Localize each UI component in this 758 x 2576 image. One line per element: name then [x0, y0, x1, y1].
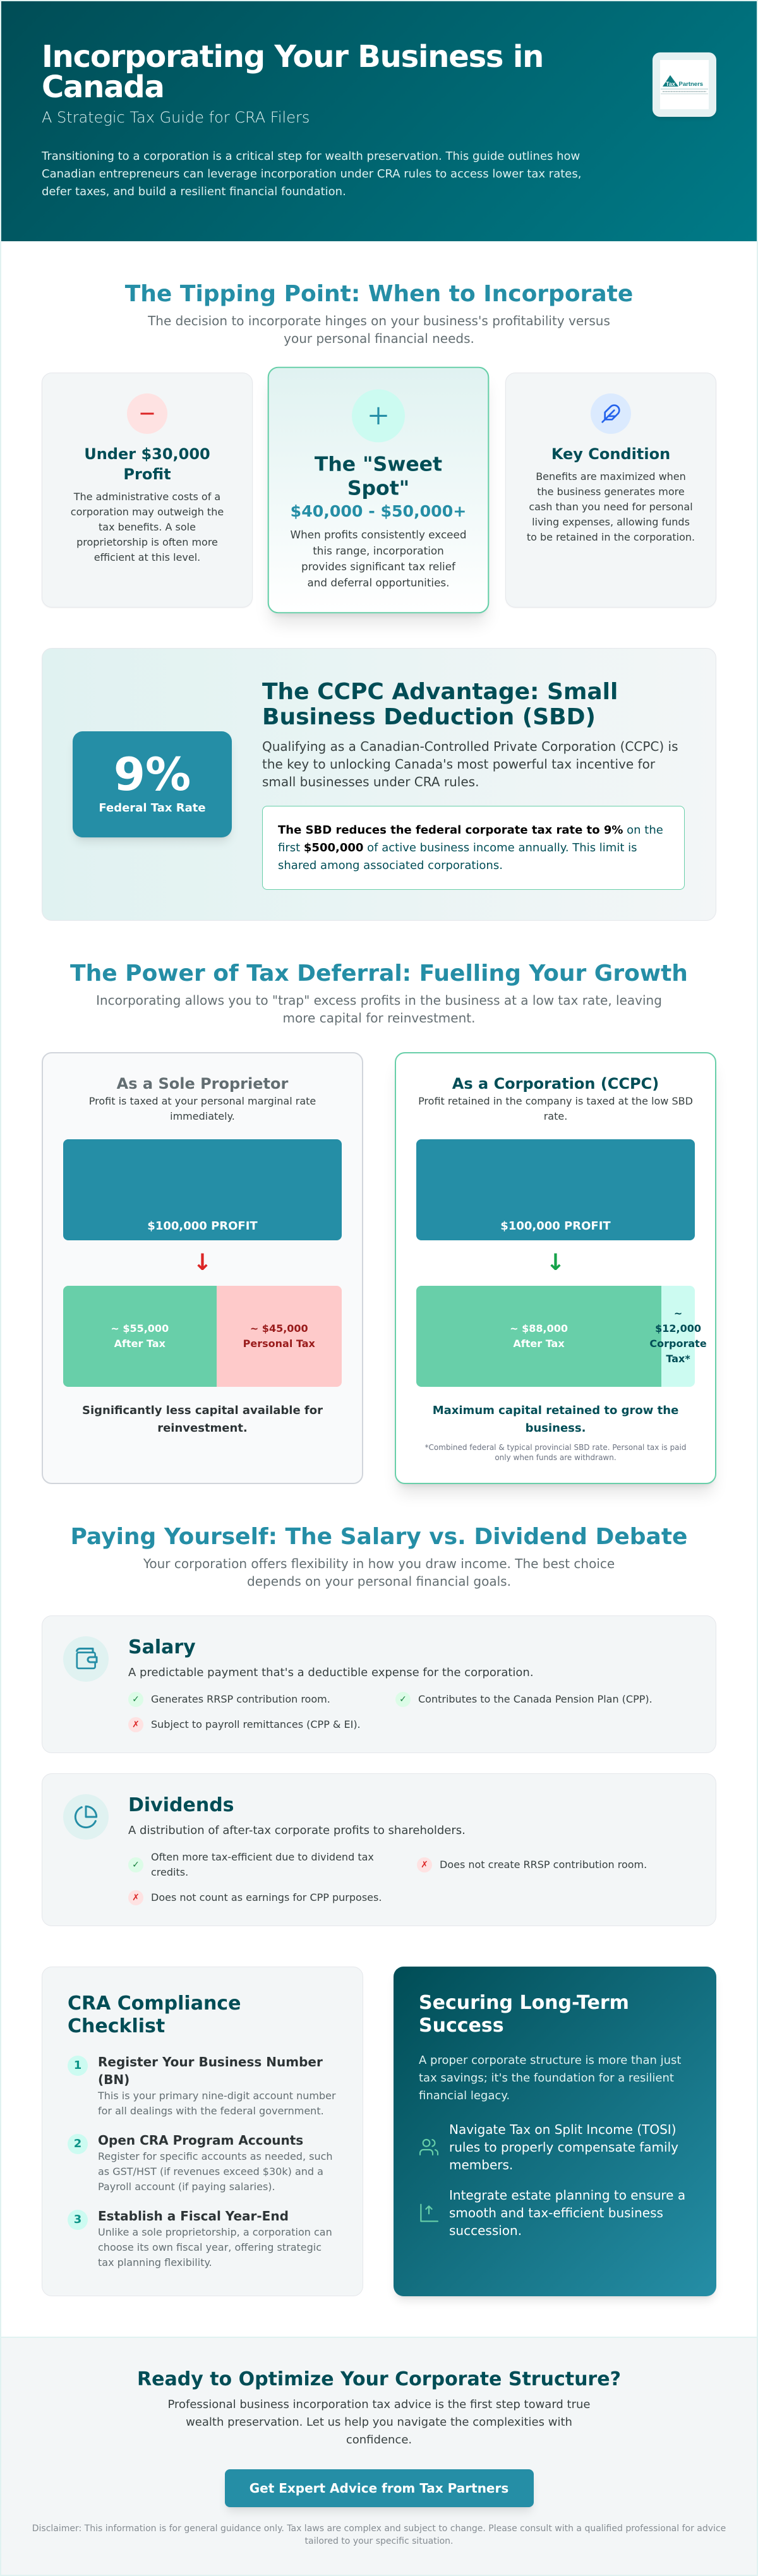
- point: estate planning: Integrate estate planning to ensure a: [449, 2188, 685, 2203]
- section intro: [96, 993, 662, 1026]
- footnote: [424, 1443, 686, 1462]
- pro: CPP: Contributes to the Canada Pension Plan (CPP).: [418, 1693, 653, 1705]
- icon: feather: [591, 393, 631, 434]
- pro: tax efficient: credits.: [151, 1866, 188, 1878]
- CTA button: [225, 2469, 533, 2507]
- card text: efficient at this level.: [94, 551, 200, 563]
- step 1: for all dealings with the federal government.: [98, 2105, 324, 2117]
- card: sweet spot: [268, 367, 489, 613]
- heading: The CCPC Advantage: Small: [262, 678, 618, 705]
- panel title: As a Sole Proprietor: [117, 1075, 288, 1093]
- panel text: Profit retained in the company is taxed at the low SBD: [418, 1095, 693, 1107]
- pro: tax efficient: [128, 1851, 374, 1878]
- con: no RRSP room: ✗: [421, 1860, 428, 1870]
- icon: minus: [127, 393, 167, 434]
- card title: Key Condition: [551, 445, 670, 463]
- panel: salary: [42, 1615, 716, 1753]
- text: the key to unlocking Canada's most powerful tax incentive for: [262, 757, 655, 772]
- heading: The Power of Tax Deferral: Fuelling Your Growth: [70, 961, 688, 986]
- after tax segment: After Tax: [114, 1338, 165, 1350]
- after tax segment: [416, 1286, 661, 1387]
- intro paragraph: defer taxes, and build a resilient financial foundation.: [42, 185, 346, 198]
- step 3: Unlike a sole proprietorship, a corporation can: [98, 2226, 332, 2238]
- SBD explanation: [262, 678, 685, 890]
- step 1: [68, 2054, 336, 2117]
- intro paragraph: Transitioning to a corporation is a critical step for wealth preservation. This guide outlines how: [42, 150, 580, 163]
- panel text: rate.: [544, 1110, 567, 1122]
- panel: long-term success: [394, 1967, 716, 2296]
- section intro: your personal financial needs.: [284, 331, 474, 346]
- card text: and deferral opportunities.: [307, 576, 450, 589]
- pro: RRSP room: ✓: [132, 1694, 140, 1704]
- card text: When profits consistently exceed: [290, 529, 467, 541]
- card text: Benefits are maximized when: [536, 470, 686, 482]
- icon: users: [419, 2138, 438, 2155]
- con: payroll: ✗: [132, 1720, 140, 1730]
- CTA heading: Ready to Optimize Your Corporate Structure?: [137, 2368, 621, 2390]
- section intro: [143, 1556, 615, 1589]
- panel text: immediately.: [170, 1110, 235, 1122]
- pro: CPP: ✓: [399, 1694, 407, 1704]
- corporate tax segment: Corporate: [649, 1338, 707, 1350]
- summary: Significantly less capital available for: [82, 1404, 323, 1417]
- title: Incorporating Your Business in: [42, 39, 543, 75]
- heading: Success: [419, 2015, 504, 2037]
- card text: this range, incorporation: [313, 544, 444, 557]
- intro paragraph: [42, 150, 581, 198]
- arrow: down red: ↓: [193, 1250, 212, 1276]
- profit bar: $100,000 PROFIT: [500, 1219, 611, 1233]
- point: estate planning: [420, 2188, 685, 2238]
- header banner: [1, 1, 757, 241]
- step 2: [68, 2133, 333, 2193]
- after tax segment: ~ $55,000: [111, 1322, 169, 1334]
- card text: The administrative costs of a: [74, 491, 220, 503]
- pro: tax efficient: ✓: [132, 1860, 140, 1870]
- summary: [433, 1404, 678, 1435]
- disclaimer: Disclaimer: This information is for general guidance only. Tax laws are complex and subject to change. Please consult with a qualified professional for advice: [32, 2524, 726, 2534]
- panel title: As a Corporation (CCPC): [452, 1075, 659, 1093]
- panel: CRA compliance checklist: [42, 1967, 363, 2296]
- CTA button: Get Expert Advice from Tax Partners: [250, 2481, 508, 2496]
- corporate tax segment: [661, 1286, 695, 1387]
- card text: to be retained in the corporation.: [527, 531, 695, 543]
- step 2: as GST/HST (if revenues exceed $30k) and a: [98, 2166, 323, 2178]
- text: A proper corporate structure is more than just: [419, 2054, 681, 2067]
- corporate tax segment: ~: [674, 1307, 682, 1319]
- disclaimer: tailored to your specific situation.: [304, 2536, 454, 2546]
- summary: reinvestment.: [157, 1422, 248, 1435]
- heading: Paying Yourself: The Salary vs. Dividend Debate: [71, 1524, 687, 1550]
- card text: tax benefits. A sole: [99, 521, 196, 533]
- logo: Tax Partners: [653, 52, 716, 117]
- section: paying yourself heading: [71, 1524, 687, 1589]
- panel text: [418, 1095, 693, 1122]
- step 1: 1: [74, 2059, 81, 2072]
- CTA text: [1, 2396, 757, 2449]
- personal tax segment: Personal Tax: [243, 1338, 315, 1350]
- card: key condition: [505, 373, 716, 608]
- step 1: Register Your Business Number: [98, 2054, 323, 2070]
- callout: first $500,000 of active business income annually. This limit is: [278, 841, 637, 854]
- heading: [68, 1992, 241, 2037]
- callout: shared among associated corporations.: [278, 859, 503, 872]
- con: no RRSP room: Does not create RRSP contribution room.: [440, 1859, 647, 1871]
- heading: [419, 1992, 629, 2037]
- card title: The "Sweet: [315, 453, 442, 476]
- heading: [262, 678, 618, 730]
- card text: corporation may outweigh the: [71, 506, 224, 518]
- panel: sole proprietor: [42, 1052, 363, 1484]
- heading: Securing Long-Term: [419, 1992, 629, 2014]
- section: tax deferral: [42, 961, 718, 1497]
- profit bar: [416, 1139, 695, 1240]
- stat: 9% federal tax rate: [73, 731, 232, 837]
- section intro: Your corporation offers flexibility in how you draw income. The best choice: [143, 1556, 615, 1571]
- con: no CPP: ✗: [132, 1893, 140, 1903]
- step 1: This is your primary nine-digit account number: [98, 2090, 336, 2102]
- point: TOSI: [419, 2122, 678, 2172]
- subtitle: A Strategic Tax Guide for CRA Filers: [42, 109, 310, 126]
- card text: living expenses, allowing funds: [532, 516, 690, 528]
- step 2: 2: [74, 2137, 81, 2150]
- section intro: depends on your personal financial goals.: [247, 1574, 511, 1589]
- after tax segment: ~ $88,000: [510, 1322, 568, 1334]
- section intro: [148, 313, 610, 346]
- stat: 9% federal tax rate: 9%: [114, 748, 191, 801]
- CTA text: wealth preservation. Let us help you navigate the complexities with: [186, 2416, 572, 2429]
- step 3: 3: [74, 2213, 81, 2226]
- point: estate planning: succession.: [449, 2223, 522, 2238]
- section: tipping point: [42, 281, 716, 626]
- summary: [82, 1404, 323, 1435]
- description: A predictable payment that's a deductible expense for the corporation.: [128, 1666, 534, 1679]
- split bar: [416, 1286, 707, 1387]
- text: [419, 2054, 681, 2102]
- section intro: Incorporating allows you to "trap" excess profits in the business at a low tax rate, leaving: [96, 993, 662, 1008]
- callout: [262, 806, 685, 889]
- comparison: [42, 1052, 718, 1497]
- card title: Spot": [347, 477, 409, 500]
- step 3: tax planning flexibility.: [98, 2256, 212, 2268]
- split bar: [63, 1286, 342, 1387]
- text: Qualifying as a Canadian-Controlled Private Corporation (CCPC) is: [262, 739, 678, 754]
- text: financial legacy.: [419, 2089, 510, 2102]
- intro paragraph: Canadian entrepreneurs can leverage incorporation under CRA rules to access lower tax rates,: [42, 167, 581, 181]
- logo: Tax Partners: Tax: [666, 81, 675, 87]
- icon: pie chart: [63, 1794, 109, 1840]
- panel text: Profit is taxed at your personal marginal rate: [89, 1095, 316, 1107]
- icon: chart arrow: [419, 2203, 439, 2223]
- footer call to action: [1, 2337, 757, 2576]
- summary: business.: [526, 1422, 586, 1435]
- card title: Profit: [123, 465, 171, 483]
- pro: RRSP room: Generates RRSP contribution room.: [151, 1693, 330, 1705]
- title: Canada: [42, 69, 164, 105]
- title: Dividends: [128, 1794, 234, 1816]
- profit bar: [63, 1139, 342, 1240]
- footnote: only when funds are withdrawn.: [495, 1453, 617, 1462]
- card text: [290, 529, 467, 589]
- text: small businesses under CRA rules.: [262, 774, 479, 789]
- step 2: Payroll account (if paying salaries).: [98, 2181, 275, 2193]
- text: tax savings; it's the foundation for a resilient: [419, 2071, 674, 2085]
- pro: tax efficient: Often more tax-efficient due to dividend tax: [151, 1851, 374, 1863]
- heading: Checklist: [68, 2015, 165, 2037]
- step 3: choose its own fiscal year, offering strategic: [98, 2241, 322, 2253]
- panel text: [89, 1095, 316, 1122]
- disclaimer: [1, 2522, 757, 2548]
- panel: dividends: [42, 1773, 716, 1926]
- icon: wallet: [63, 1636, 109, 1682]
- step 2: Open CRA Program Accounts: [98, 2133, 303, 2148]
- step 2: Register for specific accounts as needed, such: [98, 2150, 333, 2162]
- icon: plus: [352, 389, 405, 442]
- footnote: *Combined federal & typical provincial SBD rate. Personal tax is paid: [424, 1443, 686, 1452]
- heading: CRA Compliance: [68, 1992, 241, 2015]
- con: payroll: Subject to payroll remittances (CPP & EI).: [151, 1718, 361, 1730]
- summary: Maximum capital retained to grow the: [433, 1404, 678, 1417]
- text: [262, 739, 678, 789]
- card text: [527, 470, 695, 543]
- card title: [315, 453, 442, 500]
- corporate tax segment: $12,000: [655, 1322, 701, 1334]
- card text: proprietorship is often more: [76, 536, 218, 548]
- personal tax segment: [217, 1286, 342, 1387]
- heading: The Tipping Point: When to Incorporate: [125, 281, 633, 307]
- profit bar: $100,000 PROFIT: [147, 1219, 258, 1233]
- title: Salary: [128, 1636, 196, 1658]
- panel: CCPC advantage: [42, 648, 716, 921]
- panel: corporation: [395, 1052, 716, 1484]
- personal tax segment: ~ $45,000: [250, 1322, 308, 1334]
- step 3: [68, 2208, 332, 2268]
- after tax segment: [63, 1286, 217, 1387]
- step 3: Establish a Fiscal Year-End: [98, 2208, 289, 2224]
- heading: Business Deduction (SBD): [262, 704, 596, 730]
- section intro: The decision to incorporate hinges on your business's profitability versus: [148, 313, 610, 328]
- stat: 9% federal tax rate: Federal Tax Rate: [99, 801, 206, 815]
- point: estate planning: smooth and tax-efficient business: [449, 2205, 663, 2220]
- card text: provides significant tax relief: [301, 560, 455, 573]
- logo: Tax Partners: Partners: [678, 81, 703, 88]
- card text: [71, 491, 224, 563]
- card text: cash than you need for personal: [529, 501, 693, 513]
- point: TOSI: members.: [449, 2157, 513, 2172]
- profit range: $40,000 - $50,000+: [291, 502, 466, 520]
- card title: Under $30,000: [84, 445, 210, 463]
- arrow: down green: ↓: [546, 1250, 565, 1276]
- step 1: (BN): [98, 2072, 129, 2087]
- callout: The SBD reduces the federal corporate tax rate to 9% on the: [278, 824, 663, 836]
- card text: the business generates more: [537, 486, 685, 498]
- CTA text: Professional business incorporation tax advice is the first step toward true: [167, 2398, 591, 2411]
- section intro: more capital for reinvestment.: [283, 1010, 475, 1026]
- card: under $30,000: [42, 373, 253, 608]
- three profit cards: [42, 366, 716, 626]
- con: no CPP: Does not count as earnings for CPP purposes.: [151, 1891, 382, 1903]
- title: [42, 39, 543, 105]
- point: TOSI: Navigate Tax on Split Income (TOSI): [449, 2122, 677, 2137]
- description: A distribution of after-tax corporate profits to shareholders.: [128, 1824, 466, 1837]
- CTA text: confidence.: [346, 2433, 412, 2447]
- corporate tax segment: Tax*: [666, 1353, 690, 1365]
- after tax segment: After Tax: [513, 1338, 565, 1350]
- point: TOSI: rules to properly compensate family: [449, 2140, 678, 2155]
- card title: [84, 445, 210, 483]
